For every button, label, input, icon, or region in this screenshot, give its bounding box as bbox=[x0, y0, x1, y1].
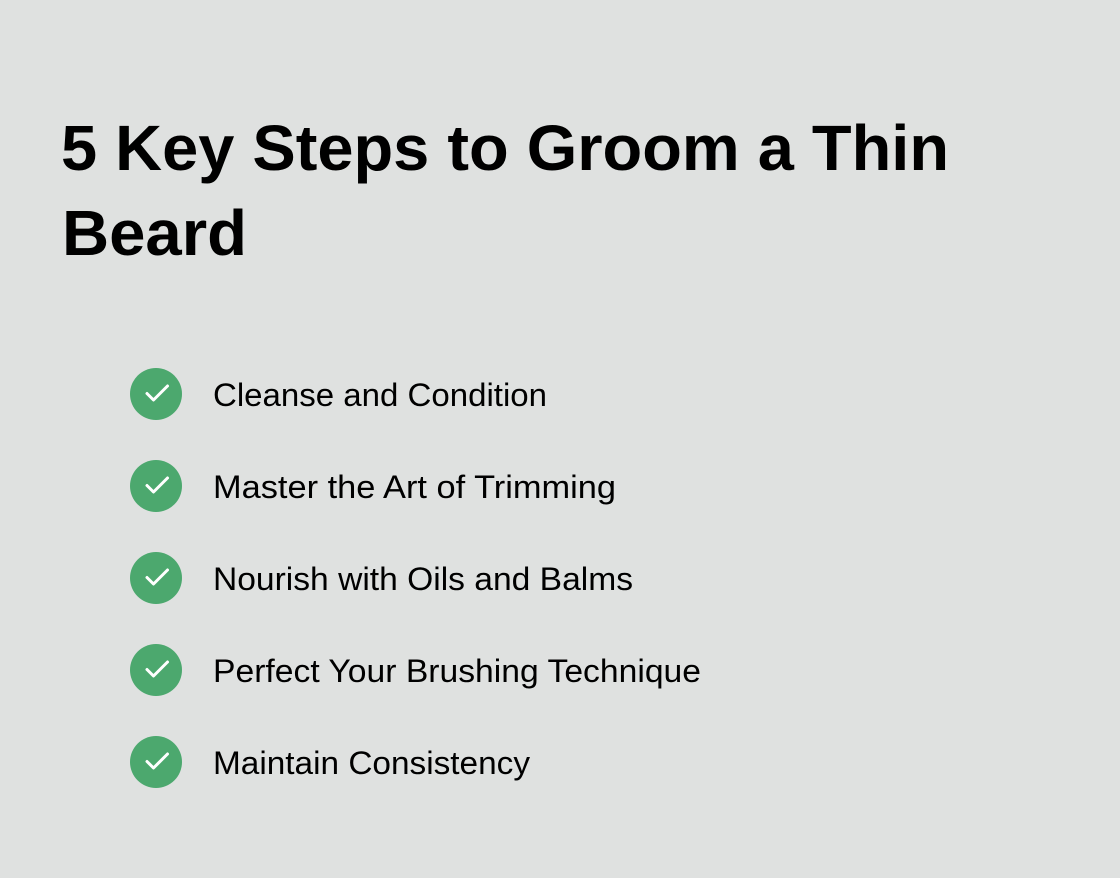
title: Beard bbox=[62, 197, 247, 269]
checklist bbox=[130, 368, 701, 788]
list item: Maintain Consistency bbox=[130, 736, 530, 788]
list item: Cleanse and Condition: Cleanse and Condition bbox=[213, 377, 547, 413]
list item: Maintain Consistency: Maintain Consistency bbox=[213, 745, 530, 781]
list item: Nourish with Oils and Balms bbox=[130, 552, 633, 604]
title bbox=[61, 112, 949, 269]
list item: Master the Art of Trimming: Master the Art of Trimming bbox=[213, 469, 616, 505]
list item: Cleanse and Condition bbox=[130, 368, 547, 420]
list item: Perfect Your Brushing Technique: Perfect Your Brushing Technique bbox=[213, 653, 701, 689]
list item: Perfect Your Brushing Technique bbox=[130, 644, 701, 696]
list item: Master the Art of Trimming bbox=[130, 460, 616, 512]
title: 5 Key Steps to Groom a Thin bbox=[61, 112, 949, 184]
list item: Nourish with Oils and Balms: Nourish with Oils and Balms bbox=[213, 561, 633, 597]
